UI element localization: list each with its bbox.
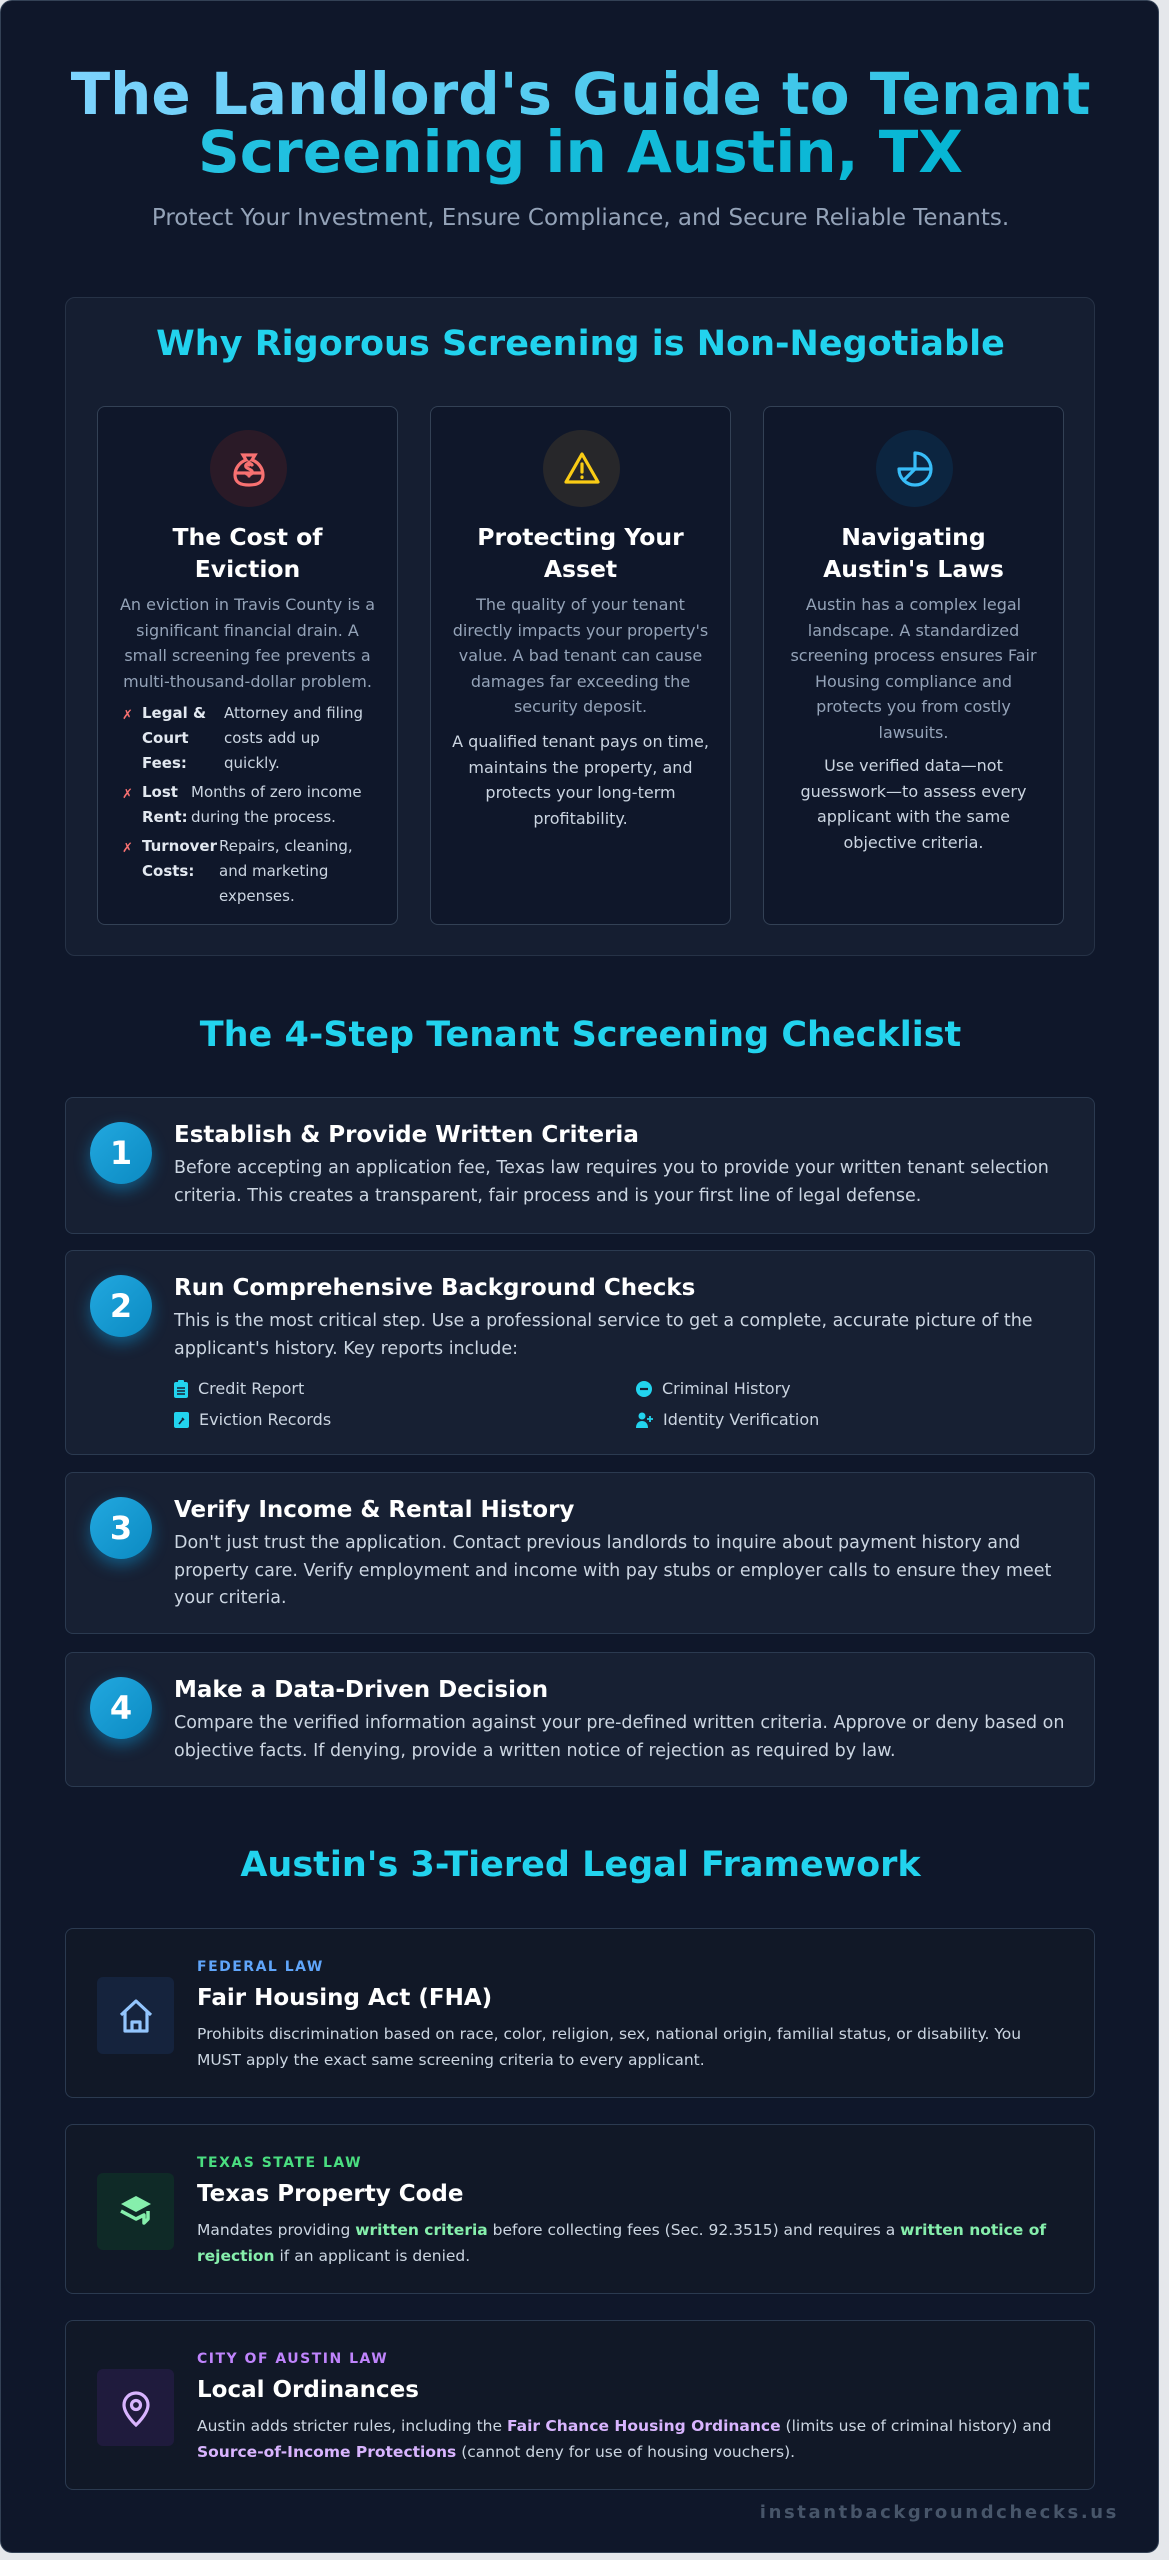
- bullet: turnover costs: Repairs, cleaning, and marketing expenses.: [219, 837, 353, 905]
- heading: legal framework: Austin's 3-Tiered Legal Framework: [240, 1845, 921, 1885]
- title: The Landlord's Guide to Tenant: [71, 60, 1090, 128]
- step 4: Make a Data-Driven Decision: [174, 1677, 548, 1703]
- law: federal: [65, 1928, 1095, 2098]
- heading: checklist: The 4-Step Tenant Screening Checklist: [200, 1015, 961, 1055]
- step 4: 4: [110, 1689, 132, 1727]
- card: protecting asset: A qualified tenant pays on time, maintains the property, and protects your long-term profitability.: [452, 732, 709, 828]
- icon: money bag: [210, 430, 287, 507]
- item: identity: Identity Verification: [663, 1410, 819, 1429]
- icon: warning: [543, 430, 620, 507]
- title: Screening in Austin, TX: [198, 118, 963, 186]
- item: eviction records: Eviction Records: [199, 1410, 331, 1429]
- subtitle: Protect Your Investment, Ensure Compliance, and Secure Reliable Tenants.: [152, 205, 1009, 231]
- card: protecting asset: Asset: [544, 555, 617, 583]
- step 2: This is the most critical step. Use a professional service to get a complete, accurate picture of the applicant's history. Key reports include:: [174, 1311, 1033, 1358]
- card: cost of eviction: The Cost of: [172, 523, 323, 551]
- icon: pie chart: [876, 430, 953, 507]
- card: austin laws: Austin's Laws: [823, 555, 1004, 583]
- card: austin laws: Use verified data—not guesswork—to assess every applicant with the same objective criteria.: [801, 756, 1026, 852]
- law: austin: [65, 2320, 1095, 2490]
- law: texas: [65, 2124, 1095, 2294]
- bullet: turnover costs: Turnover Costs:: [142, 837, 217, 880]
- panel: why screening: [65, 297, 1095, 956]
- bullet: lost rent: Lost Rent:: [142, 783, 188, 826]
- law: federal: Fair Housing Act (FHA): [197, 1985, 492, 2011]
- card: austin laws: Navigating: [841, 523, 986, 551]
- card: protecting asset: The quality of your tenant directly impacts your property's value. A bad tenant can cause damages far exceeding the security deposit.: [453, 595, 708, 716]
- law: texas: TEXAS STATE LAW: [197, 2155, 362, 2171]
- bullet: legal fees: Attorney and filing costs add up quickly.: [224, 704, 363, 772]
- step 3: [65, 1472, 1095, 1634]
- step 3: Verify Income & Rental History: [174, 1497, 574, 1523]
- bullet: turnover costs: [122, 837, 353, 905]
- icon: map pin: [97, 2369, 174, 2446]
- law: austin: Austin adds stricter rules, including the Fair Chance Housing Ordinance (limits use of criminal history) and Source-of-Income Protections (cannot deny for use of housing vouchers).: [197, 2417, 1052, 2461]
- item: credit report: Credit Report: [198, 1379, 304, 1398]
- card: cost of eviction: Eviction: [195, 555, 300, 583]
- step 4: Compare the verified information against your pre-defined written criteria. Approve or deny based on objective facts. If denying, provide a written notice of rejection as required by law.: [174, 1713, 1064, 1760]
- bullet: legal fees: [122, 704, 363, 772]
- icon: house: [97, 1977, 174, 2054]
- step 2: [65, 1250, 1095, 1455]
- step 3: Don't just trust the application. Contact previous landlords to inquire about payment history and property care. Verify employment and income with pay stubs or employer calls to ensure they meet your criteria.: [174, 1533, 1051, 1608]
- heading: why screening: Why Rigorous Screening is Non-Negotiable: [156, 324, 1005, 364]
- card: cost of eviction: An eviction in Travis County is a significant financial drain. A small screening fee prevents a multi-thousand-dollar problem.: [120, 595, 375, 690]
- step 4: [65, 1652, 1095, 1787]
- step 2: 2: [110, 1287, 132, 1325]
- card: protecting asset: Protecting Your: [477, 523, 684, 551]
- icon: layers: [97, 2173, 174, 2250]
- card: protecting asset: [430, 406, 731, 925]
- item: criminal history: Criminal History: [662, 1379, 791, 1398]
- bullet: legal fees: ✗: [122, 708, 133, 723]
- bullet: turnover costs: ✗: [122, 841, 133, 856]
- card: cost of eviction: [97, 406, 398, 925]
- law: texas: Mandates providing written criteria before collecting fees (Sec. 92.3515) and requires a written notice of rejection if an applicant is denied.: [197, 2221, 1046, 2265]
- law: texas: Texas Property Code: [197, 2181, 463, 2207]
- law: federal: FEDERAL LAW: [197, 1959, 324, 1975]
- bullet: lost rent: Months of zero income during the process.: [191, 783, 362, 826]
- law: federal: Prohibits discrimination based on race, color, religion, sex, national origin, familial status, or disability. You MUST apply the exact same screening criteria to every applicant.: [197, 2025, 1021, 2069]
- card: austin laws: [763, 406, 1064, 925]
- card: austin laws: Austin has a complex legal landscape. A standardized screening process ensures Fair Housing compliance and protects you from costly lawsuits.: [790, 595, 1037, 742]
- law: austin: Local Ordinances: [197, 2377, 419, 2403]
- step 1: Establish & Provide Written Criteria: [174, 1122, 639, 1148]
- step 1: 1: [110, 1134, 132, 1172]
- bullet: lost rent: ✗: [122, 787, 133, 802]
- step 1: Before accepting an application fee, Texas law requires you to provide your written tenant selection criteria. This creates a transparent, fair process and is your first line of legal defense.: [174, 1158, 1049, 1206]
- step 2: Run Comprehensive Background Checks: [174, 1275, 695, 1301]
- step 3: 3: [110, 1509, 132, 1547]
- step 1: [65, 1097, 1095, 1234]
- title: [71, 60, 1090, 186]
- bullet: legal fees: Legal & Court Fees:: [142, 704, 206, 772]
- footer: website: instantbackgroundchecks.us: [760, 2502, 1119, 2523]
- law: austin: CITY OF AUSTIN LAW: [197, 2351, 388, 2367]
